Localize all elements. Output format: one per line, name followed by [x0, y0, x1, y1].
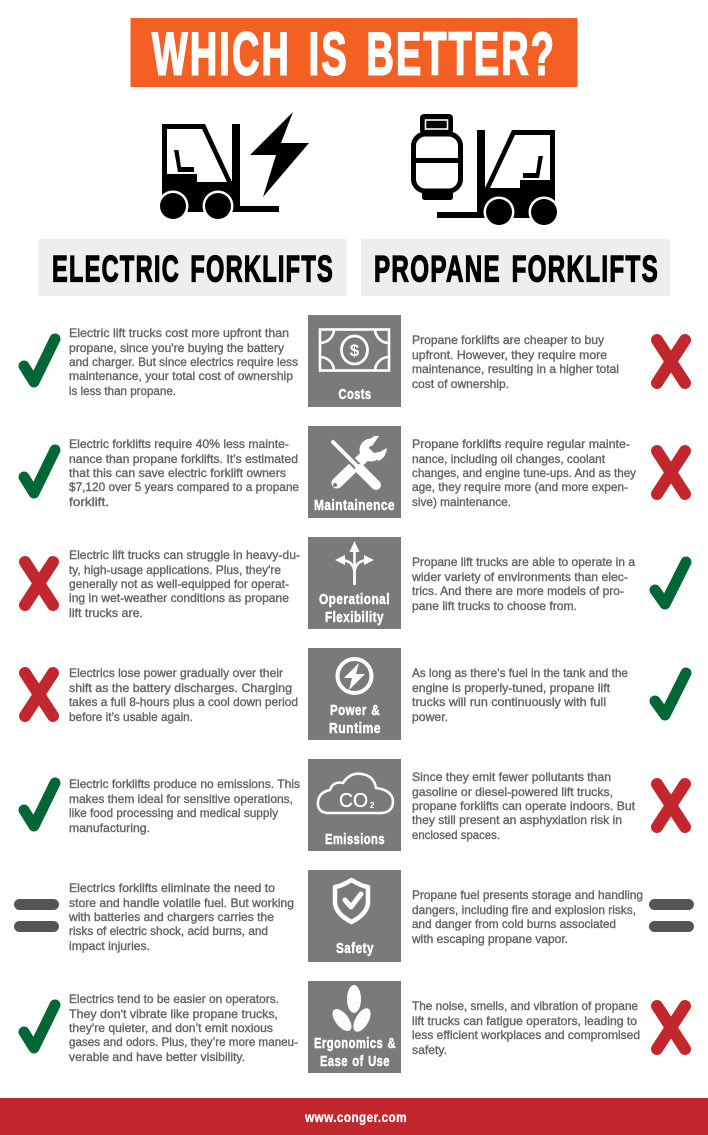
text: electric maintenance: forklift. [69, 495, 109, 509]
icon: CO2 cloud [318, 774, 393, 813]
icon: equal sign [649, 899, 694, 932]
text: electric flexibility [69, 548, 300, 620]
text: propane flexibility: pane lift trucks to choose from. [412, 599, 577, 613]
text: propane safety: dangers, including fire and explosion risks, [412, 903, 636, 917]
text: electric emissions: like food processing and medical supply [69, 806, 278, 820]
panel: safety: Safety [336, 940, 374, 957]
icon: x mark [657, 1006, 685, 1049]
text: propane power [412, 666, 628, 724]
text: electric maintenance: that this can save electric forklift owners [69, 466, 286, 480]
text: electric costs: propane, since you're buying the battery [69, 341, 284, 355]
text: electric flexibility: ty, high-usage applications. Plus, they're [69, 563, 281, 577]
panel: emissions: Emissions [325, 831, 385, 848]
text: propane ergonomics: safety. [412, 1043, 447, 1057]
icon: shield with check [335, 880, 368, 922]
icon: wrench and screwdriver [333, 433, 390, 489]
text: electric emissions [69, 777, 300, 835]
panel: emissions [308, 759, 401, 851]
text: electric ergonomics [69, 992, 298, 1064]
text: electric maintenance [69, 437, 299, 509]
icon: x mark [25, 562, 53, 605]
footer bar: www.conger.com [304, 1109, 407, 1125]
row: safety [14, 870, 694, 962]
text: electric emissions: Electric forklifts produce no emissions. This [69, 777, 300, 791]
icon: x mark [657, 451, 685, 494]
text: electric costs: and charger. But since electrics require less [69, 355, 298, 369]
panel: costs [308, 315, 401, 407]
text: propane costs: cost of ownership. [412, 377, 509, 391]
icon: check mark [24, 339, 55, 382]
text: electric ergonomics: verable and have better visibility. [69, 1050, 245, 1064]
icon: check mark [24, 783, 55, 826]
icon: x mark [25, 673, 53, 716]
text: propane flexibility: Propane lift trucks are able to operate in a [412, 555, 635, 569]
text: propane safety: with escaping propane vapor. [411, 932, 568, 946]
text: propane safety: Propane fuel presents storage and handling [412, 888, 643, 902]
text: propane maintenance [412, 437, 636, 509]
text: electric safety: impact injuries. [69, 939, 150, 953]
footer bar [0, 1098, 708, 1135]
label: ergonomics and ease of use: Ergonomics & [314, 1035, 396, 1052]
row: maintenance [24, 426, 685, 518]
text: electric safety: store and handle volatile fuel. But working [69, 896, 294, 910]
panel: ergonomics and ease of use [308, 981, 401, 1073]
text: electric power [69, 666, 298, 724]
text: propane ergonomics [412, 999, 640, 1057]
text: propane power: power. [412, 710, 448, 724]
icon: lightning circle [338, 659, 372, 693]
panel: maintainence: Maintainence [314, 497, 395, 514]
row: operational flexibility [25, 537, 686, 629]
row: emissions [24, 759, 685, 851]
text: propane power: engine is properly-tuned, propane lift [412, 681, 611, 695]
text: electric power: shift as the battery discharges. Charging [69, 681, 292, 695]
icon: three-way arrows [335, 541, 374, 585]
label: ergonomics and ease of use: Ease of Use [320, 1053, 390, 1070]
text: propane flexibility [411, 555, 635, 613]
icon: equal sign [14, 899, 59, 932]
text: propane ergonomics: The noise, smells, and vibration of propane [412, 999, 638, 1013]
text: propane safety: and danger from cold burns associated [412, 917, 616, 931]
text: propane maintenance: changes, and engine tune-ups. And as they [412, 466, 636, 480]
text: electric maintenance: nance than propane forklifts. It’s estimated [69, 452, 298, 466]
text: propane emissions: propane forklifts can operate indoors. But [412, 799, 636, 813]
icon: CO2 cloud: CO [339, 790, 368, 812]
panel: operational flexibility [308, 537, 401, 629]
text: electric power: Electrics lose power gradually over their [69, 666, 283, 680]
label: operational flexibility: Operational [319, 591, 390, 608]
text: propane safety [411, 888, 643, 946]
text: electric emissions: makes them ideal for sensitive operations, [69, 792, 293, 806]
text: electric maintenance: Electric forklifts require 40% less mainte- [69, 437, 289, 451]
text: electric flexibility: lift trucks are. [69, 606, 143, 620]
text: electric power: before it’s usable again. [69, 710, 193, 724]
text: electric costs: is less than propane. [69, 384, 176, 398]
text: electric safety: Electrics forklifts eliminate the need to [69, 881, 275, 895]
text: propane emissions: gasoline or diesel-powered lift trucks, [412, 785, 613, 799]
text: propane costs: upfront. However, they require more [412, 348, 607, 362]
text: propane costs [412, 333, 619, 391]
text: electric ergonomics: They don't vibrate like propane trucks, [69, 1007, 278, 1021]
text: electric emissions: manufacturing. [69, 821, 150, 835]
text: propane maintenance: sive) maintenance. [412, 495, 511, 509]
icon: x mark [657, 784, 685, 827]
text: propane maintenance: nance, including oil changes, coolant [412, 452, 606, 466]
heading: electric forklifts: ELECTRIC FORKLIFTS [52, 248, 334, 290]
panel: safety [308, 870, 401, 962]
icon: check mark [655, 673, 686, 715]
heading: electric forklifts [38, 239, 346, 296]
text: electric costs: Electric lift trucks cost more upfront than [69, 326, 289, 340]
text: electric flexibility: ing in wet-weather conditions as propane [69, 591, 289, 605]
icon: check mark [24, 1005, 55, 1048]
text: electric costs [69, 326, 298, 398]
text: propane flexibility: wider variety of environments than elec- [411, 570, 628, 584]
text: electric safety [68, 881, 294, 953]
text: propane maintenance: Propane forklifts require regular mainte- [412, 437, 630, 451]
icon: x mark [657, 340, 685, 383]
text: electric safety: risks of electric shock, acid burns, and [69, 924, 268, 938]
label: power and runtime: Power & [330, 702, 380, 719]
heading: propane forklifts [361, 239, 670, 296]
icon: banknote: $ [350, 341, 360, 360]
icon: propane tank with forklift [413, 114, 560, 228]
text: electric ergonomics: gases and odors. Plus, they’re more maneu- [69, 1035, 298, 1049]
text: propane emissions: enclosed spaces. [412, 828, 500, 842]
text: electric maintenance: $7,120 over 5 years compared to a propane [69, 480, 299, 494]
icon: electric forklift with lightning bolt [158, 112, 309, 222]
icon: three leaves [329, 985, 374, 1035]
text: electric ergonomics: Electrics tend to be easier on operators. [69, 992, 279, 1006]
text: propane flexibility: trics. And there are more models of pro- [412, 584, 624, 598]
text: propane ergonomics: less efficient workplaces and compromised [412, 1028, 640, 1042]
label: ergonomics and ease of use [314, 1035, 396, 1070]
text: propane maintenance: age, they require more (and more expen- [412, 480, 628, 494]
panel: costs: Costs [338, 386, 372, 403]
text: propane costs: Propane forklifts are cheaper to buy [412, 333, 604, 347]
label: power and runtime: Runtime [329, 720, 381, 737]
panel: power and runtime [308, 648, 401, 740]
icon: check mark [24, 450, 55, 493]
text: electric ergonomics: they're quieter, and don’t emit noxious [69, 1021, 273, 1035]
text: propane emissions: they still present an asphyxiation risk in [412, 813, 622, 827]
text: propane emissions [412, 770, 636, 842]
label: operational flexibility: Flexibility [325, 609, 384, 626]
text: electric power: takes a full 8-hours plus a cool down period [69, 695, 298, 709]
text: propane power: As long as there’s fuel in the tank and the [412, 666, 628, 680]
panel: maintainence [308, 426, 401, 518]
text: propane power: trucks will run continuously with full [412, 695, 606, 709]
row: power and runtime [25, 648, 686, 740]
row: ergonomics [24, 981, 685, 1073]
text: propane emissions: Since they emit fewer pollutants than [412, 770, 611, 784]
row: costs [24, 315, 685, 407]
text: propane ergonomics: lift trucks can fatigue operators, leading to [412, 1014, 637, 1028]
icon: check mark [655, 562, 686, 604]
label: power and runtime [329, 702, 381, 737]
text: electric flexibility: generally not as well-equipped for operat- [69, 577, 289, 591]
text: electric flexibility: Electric lift trucks can struggle in heavy-du- [69, 548, 300, 562]
icon: CO2 cloud: 2 [370, 801, 375, 810]
text: propane costs: maintenance, resulting in a higher total [412, 362, 619, 376]
label: operational flexibility [319, 591, 390, 626]
text: electric costs: maintenance, your total cost of ownership [69, 369, 293, 383]
text: electric safety: with batteries and chargers carries the [68, 910, 274, 924]
